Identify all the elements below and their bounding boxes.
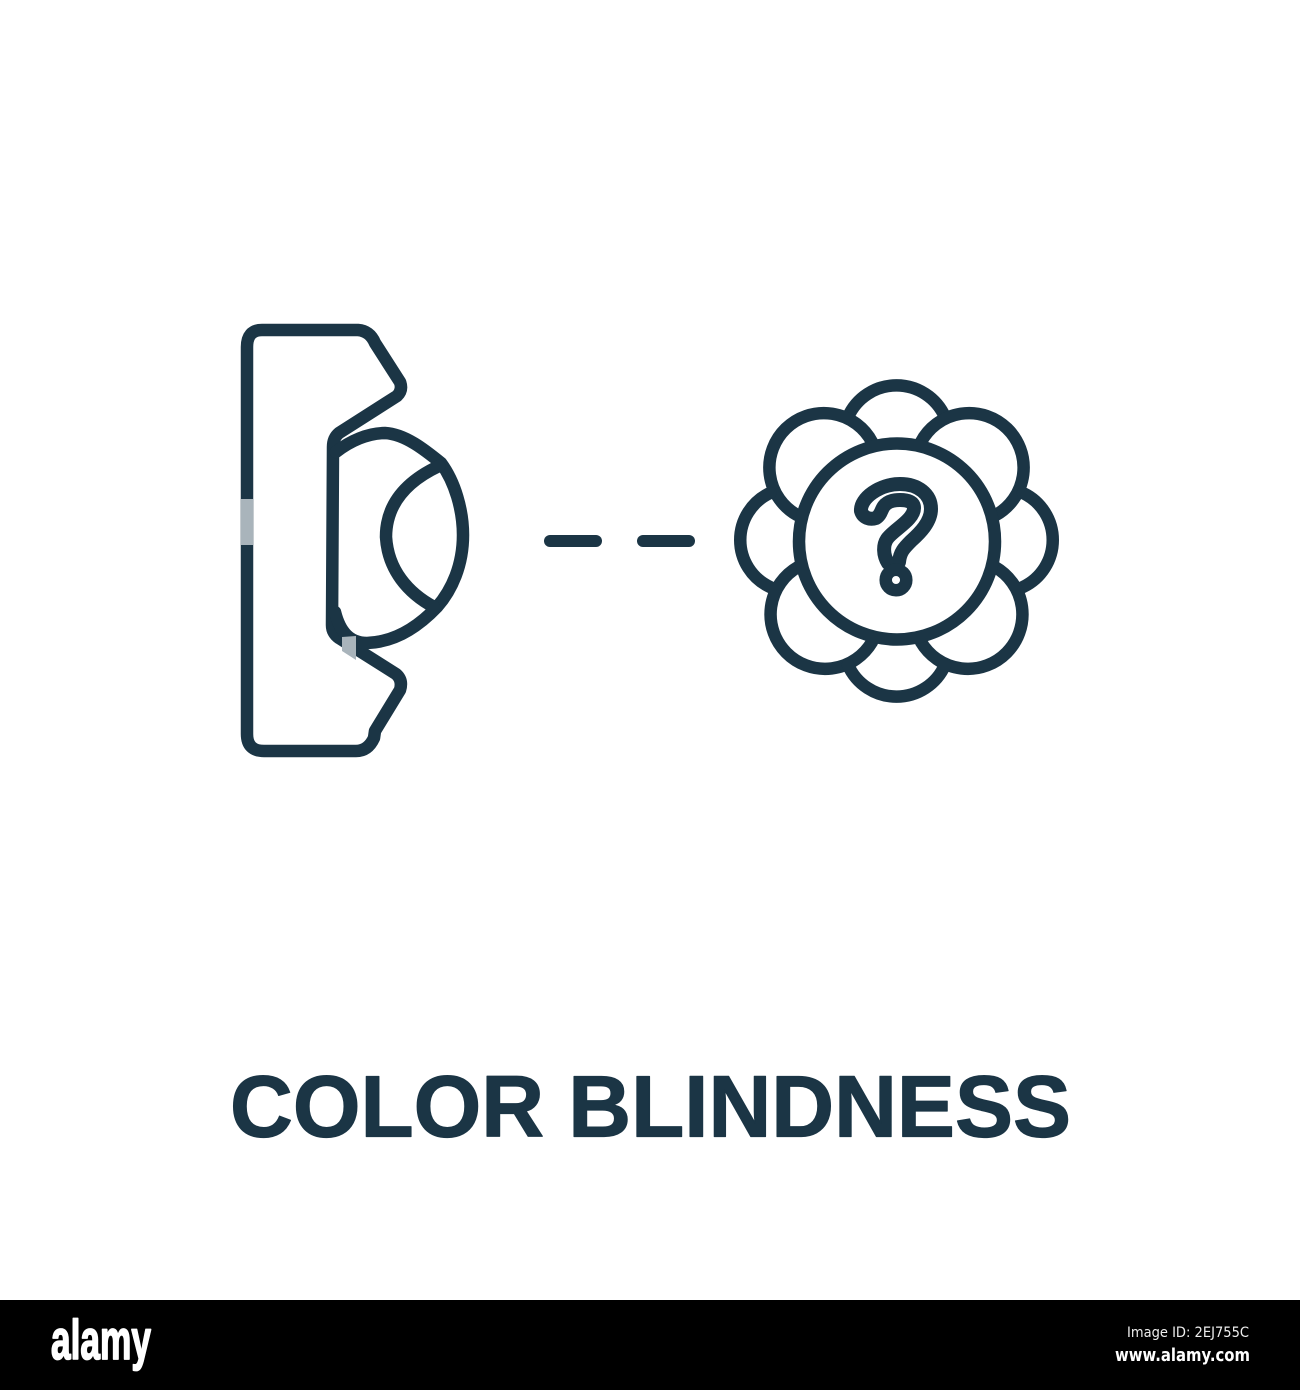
watermark fragments on eye icon	[241, 499, 356, 660]
flower petals	[740, 385, 1053, 697]
website: www.alamy.com	[1115, 1345, 1250, 1366]
question mark	[861, 484, 931, 590]
footer bar	[0, 1300, 1300, 1390]
title: COLOR BLINDNESS	[230, 1058, 1071, 1156]
arrow: dashed line of sight	[550, 535, 689, 547]
icon: flower with question mark	[740, 385, 1053, 697]
flower centre disc	[799, 444, 995, 640]
image id: Image ID: 2EJ755C	[1127, 1325, 1249, 1341]
icon: eye behind a mask	[247, 330, 463, 751]
logo: alamy: alamy	[51, 1308, 151, 1371]
